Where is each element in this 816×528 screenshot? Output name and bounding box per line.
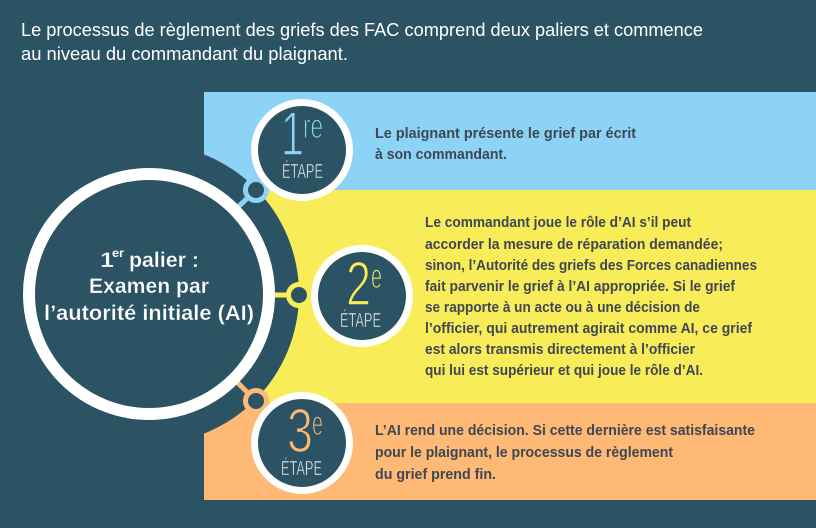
text: step 2: est alors transmis directement à l’officier: [425, 341, 695, 358]
text: step 3: [375, 422, 755, 483]
panel: step 2 band: [204, 190, 816, 403]
central circle: first level: er: [112, 246, 124, 260]
text: step 2: Le commandant joue le rôle d’AI s’il peut: [425, 214, 691, 231]
step badge 1: ÉTAPE: [282, 160, 323, 183]
text: step 1: [375, 125, 636, 163]
text: step 3: L’AI rend une décision. Si cette dernière est satisfaisante: [375, 422, 755, 439]
text: step 2: [425, 214, 757, 379]
central circle: first level: [29, 174, 269, 414]
connector: step 2: [274, 284, 310, 306]
step badge 3: 3: [287, 397, 313, 466]
step badge 3: ÉTAPE: [281, 457, 322, 480]
text: step 2: qui lui est supérieur et qui joue le rôle d’AI.: [425, 362, 703, 379]
central circle: first level: 1: [100, 249, 114, 272]
text: step 1: à son commandant.: [375, 146, 507, 163]
heading: au niveau du commandant du plaignant.: [21, 44, 348, 64]
step badge 2: e: [371, 257, 382, 296]
dark backing circle: [0, 144, 299, 444]
step badge 1: 1: [281, 100, 304, 169]
central circle: first level: Examen par: [89, 275, 209, 298]
step badge 3: [254, 396, 350, 490]
panel: step 3 band: [204, 403, 816, 500]
heading: Le processus de règlement des griefs des FAC comprend deux paliers et commence: [21, 20, 703, 40]
text: step 2: sinon, l’Autorité des griefs des Forces canadiennes: [425, 257, 757, 274]
text: step 1: Le plaignant présente le grief par écrit: [375, 125, 636, 142]
connector: step 1: [238, 180, 266, 207]
text: step 2: accorder la mesure de réparation demandée;: [425, 236, 723, 253]
connector: step 3: [238, 383, 266, 412]
panel: step 1 band: [204, 92, 816, 190]
step badge 2: ÉTAPE: [340, 309, 381, 332]
step badge 1: re: [303, 107, 323, 146]
step badge 2: [314, 248, 410, 344]
text: step 2: se rapporte à un acte ou à une décision de: [425, 299, 700, 316]
step badge 2: 2: [346, 250, 371, 319]
central circle: first level: palier :: [129, 249, 199, 272]
central circle: first level: l’autorité initiale (AI): [44, 302, 254, 325]
text: step 3: pour le plaignant, le processus de règlement: [375, 444, 673, 461]
step badge 1: [254, 100, 350, 198]
text: step 2: l’officier, qui autrement agirait comme AI, ce grief: [425, 320, 753, 337]
text: step 3: du grief prend fin.: [375, 466, 496, 483]
step badge 3: e: [312, 404, 323, 443]
heading: [21, 20, 703, 64]
text: step 2: fait parvenir le grief à l’AI appropriée. Si le grief: [425, 278, 736, 295]
